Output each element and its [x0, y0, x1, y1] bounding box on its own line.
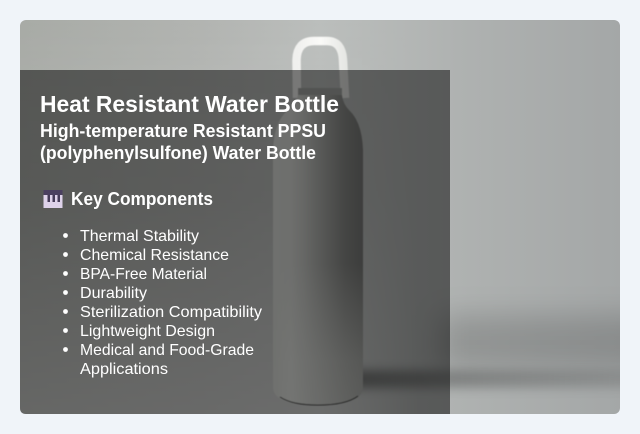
bottle handle — [296, 41, 345, 98]
subtitle: High-temperature Resistant PPSU — [40, 121, 326, 141]
item: durability: Durability — [80, 285, 147, 302]
bottle base edge — [280, 396, 358, 405]
item: sterilization compatibility: Sterilization Compatibility — [80, 304, 262, 321]
list of key components — [63, 228, 262, 378]
section heading: key components: Key Components — [71, 189, 213, 209]
bottle — [273, 41, 363, 405]
item: medical and food-grade applications — [63, 342, 254, 378]
dark text overlay panel — [20, 70, 450, 414]
subtitle: (polyphenylsulfone) Water Bottle — [40, 143, 316, 163]
item: medical and food-grade applications: Applications — [80, 361, 168, 378]
item: chemical resistance: Chemical Resistance — [80, 247, 229, 264]
bottle right-side shading — [294, 94, 364, 379]
bottle cap ring — [298, 88, 342, 96]
item: lightweight design: Lightweight Design — [80, 323, 215, 340]
title: Heat Resistant Water Bottle — [40, 91, 339, 117]
item: bpa-free material: BPA-Free Material — [80, 266, 207, 283]
bottle body — [273, 95, 363, 405]
subtitle — [40, 121, 326, 163]
icon: piano keyboard — [44, 190, 62, 208]
item: medical and food-grade applications: Medical and Food-Grade — [80, 342, 254, 359]
item: thermal stability: Thermal Stability — [80, 228, 199, 245]
